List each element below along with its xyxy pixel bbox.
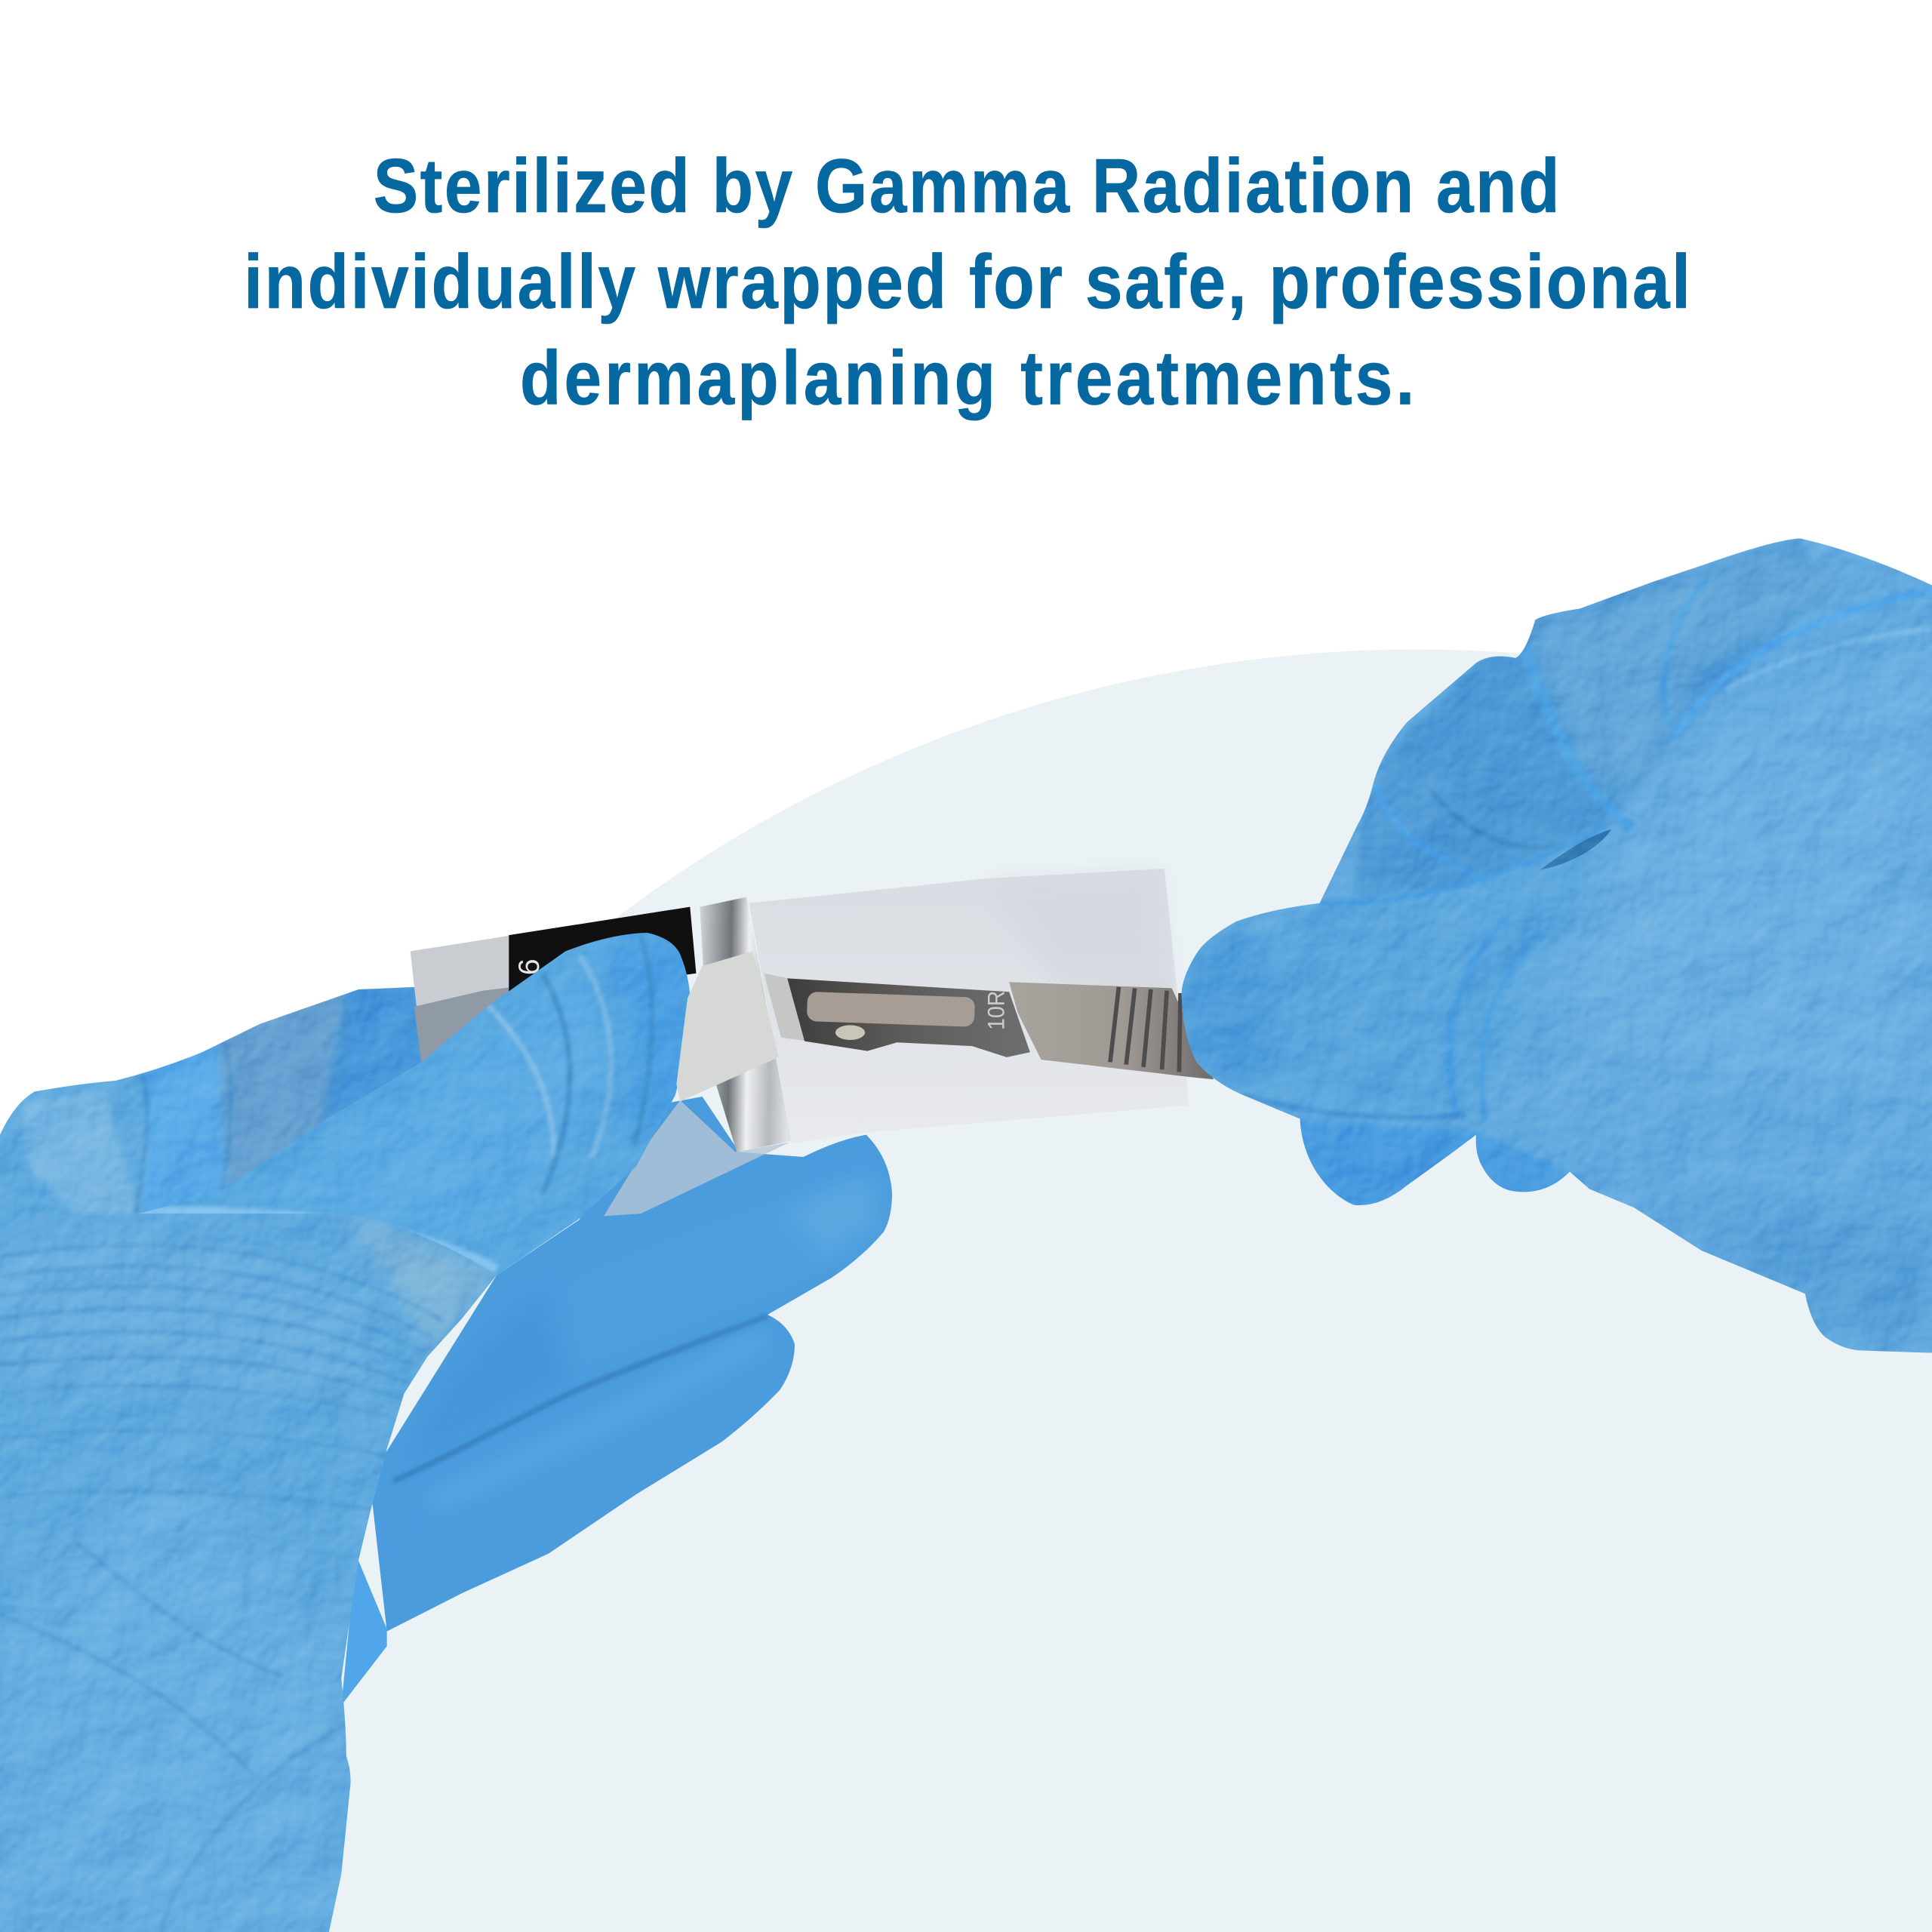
foil seal band	[700, 897, 791, 1152]
blade back shaft	[764, 974, 807, 1041]
title: individually wrapped for safe, professional	[244, 240, 1690, 325]
blade	[787, 978, 1030, 1057]
index finger	[1264, 852, 1588, 1110]
silver left end	[411, 935, 512, 1007]
palm hollow	[1540, 829, 1612, 870]
background circle	[88, 650, 1932, 1932]
blister package	[411, 869, 1189, 1216]
arm highlights	[30, 1531, 302, 1897]
blade slot	[807, 992, 975, 1027]
blade marking: 10R	[983, 991, 1010, 1030]
scalpel	[764, 974, 1214, 1079]
back of hand lighter	[1552, 641, 1932, 1109]
label mark: 9	[512, 958, 544, 975]
left hand: thumb	[139, 933, 690, 1275]
handle ribs	[1110, 987, 1180, 1072]
title: dermaplaning treatments.	[520, 336, 1414, 421]
black label	[509, 907, 696, 998]
bright bands	[1672, 590, 1932, 740]
lower transparent foil	[604, 1100, 790, 1216]
handle	[1009, 982, 1214, 1079]
left hand: cuff fold	[341, 1555, 387, 1706]
wrist band	[353, 1217, 494, 1352]
lower fingers	[1300, 1118, 1586, 1205]
arm ripples	[0, 1245, 444, 1932]
translucent sheet	[749, 869, 1189, 1143]
left hand: arm and back of hand	[0, 974, 518, 1932]
gap between fingers	[393, 1316, 768, 1481]
left hand: lower fingers	[373, 1097, 892, 1632]
title	[244, 144, 1690, 421]
back of hand shading	[220, 995, 343, 1186]
title: Sterilized by Gamma Radiation and	[374, 144, 1559, 229]
white tape tab	[676, 951, 779, 1102]
blade highlight	[835, 1025, 865, 1040]
curled fingers	[1355, 538, 1823, 900]
right hand glove	[1171, 530, 1932, 1358]
